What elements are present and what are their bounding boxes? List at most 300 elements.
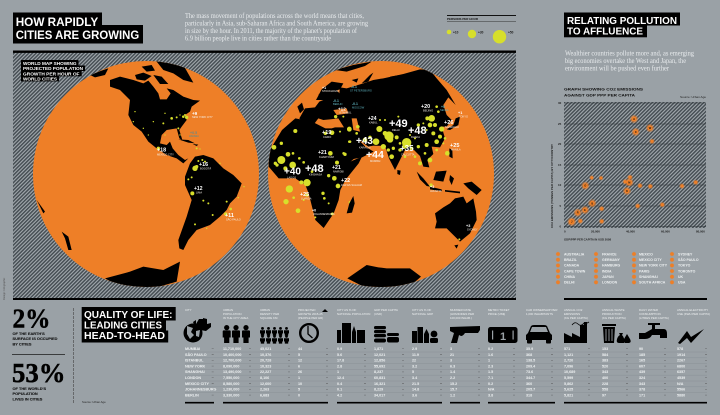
column headers: ANNUAL CO2 [564,308,583,312]
eastern hemisphere globe [268,61,494,288]
chart legend: CAPE TOWN [564,269,586,273]
column: co2: 5,625 [564,388,573,392]
chart legend: SOUTH AFRICA [639,281,666,285]
data point letters: R [577,211,579,215]
icon: globe with city [184,318,211,342]
column: density: 8,106 [260,376,269,380]
intro paragraph: in size by the hour. In 2011, the majority of the planet's population of [185,28,358,35]
city labels east: +0 [441,105,445,109]
side credit: Design: Infographic [2,277,6,300]
row dashes [213,348,706,398]
column: projected growth: 1 [298,376,300,380]
city labels east: MOSCOW [352,106,365,110]
philippines [449,148,453,158]
seas [333,108,360,132]
arabian peninsula [352,140,374,159]
pollution paragraph: environment will be pushed even further [565,66,670,72]
column: electricity: 4539 [677,376,685,380]
data points [568,115,698,226]
city labels east: STOCKHOLM [322,89,338,93]
column headers: (HOMICIDES PER [450,312,474,316]
arctic islands and greenland [90,61,193,84]
city labels east: +25 [300,192,309,198]
column: gdp per capita: 1,871 [374,347,383,351]
city labels east: LAGOS [287,176,296,180]
column headers: PRODUCTION [602,312,621,316]
column headers: ANNUAL ELECTRICITY [677,308,708,312]
city dots oceania [332,183,460,240]
data point letters: B [591,201,593,205]
chart legend: USA [678,281,686,285]
column: water: 439 [639,370,645,374]
column: density: 10,323 [260,364,271,368]
column: projected growth: 44 [298,347,303,351]
column: city: MEXICO CITY [185,382,210,386]
column headers: EMISSIONS [564,312,580,316]
column: murder rate: 3 [450,347,452,351]
antarctica [105,262,180,288]
city labels east: KINSHASA [309,172,322,176]
pollution paragraph: big economies overtake the West and Japan, the [565,58,686,65]
column headers: ANNUAL WASTE [602,308,625,312]
column headers: (PEOPLE PER HR) [298,316,323,320]
legend: persons per hour: +50 [508,30,514,34]
city labels east: ISTANBUL [339,110,352,114]
column: population: 11,710,000 [223,347,241,351]
column headers: (KG PER CAPITA) [564,316,588,320]
british isles [297,103,304,113]
column: share of population: 4.2 [337,393,342,397]
column: murder rate: 2.2 [450,376,455,380]
column: water: 343 [639,382,645,386]
city labels east: CALCUTTA [401,152,415,156]
chart legend: MEXICO [639,252,653,256]
icon: three people [223,325,250,343]
column: share of gdp: 2.9 [412,347,417,351]
column: waste: 343 [602,370,608,374]
hatched map background [13,51,516,299]
column: projected growth: 5 [298,353,300,357]
column: water: 171 [639,393,645,397]
right panel top rule [564,298,707,300]
column: waste: 153 [602,347,608,351]
legend: persons per hour: +10 [453,30,459,34]
city labels west [157,111,241,222]
column: share of gdp: 22 [412,359,416,363]
column: metro price: 1.5 [488,370,493,374]
chart legend: AUSTRALIA [564,252,585,256]
city labels east: +44 [366,149,384,161]
section title: relating pollution to affluence [564,12,680,38]
stat: 53%: 53% [12,358,66,388]
column: cars: 35.9 [526,347,533,351]
chart legend: SHANGHAI [639,275,658,279]
icon: crowd of people [260,327,289,344]
column: share of gdp: 3.6 [412,393,417,397]
chart legend: NEW YORK CITY [639,264,668,268]
chart legend: LONDON [602,281,618,285]
city labels east: SHANGHAI [445,125,459,129]
city labels east: JOHANNESBURG [313,212,335,216]
city labels east: NAIROBI [333,170,344,174]
column: murder rate: 6.3 [450,364,455,368]
stat: 2%: OF THE EARTH'S [12,331,45,336]
column headers: (KG PER CAPITA) [602,316,626,320]
city labels east: +0 [312,208,316,212]
column: cars: 344.7 [526,376,535,380]
western hemisphere globe [33,61,259,288]
column: waste: 97 [602,393,606,397]
column: share of population: 17.8 [337,359,344,363]
icon: buildings [337,323,365,343]
caribbean islands [178,139,198,146]
city labels west: +18 [157,148,166,154]
city labels west: NEW YORK CITY [192,115,213,119]
icon: coins [374,326,399,342]
data point letters: J [571,220,573,224]
arctic coast and islands [336,62,398,83]
column: co2: 5,599 [564,376,573,380]
axis labels: 0 [564,230,566,234]
column: city: MUMBAI [185,347,200,351]
icon: factory [564,322,589,343]
chart legend: TORONTO [678,269,696,273]
axis labels: 60,000 [661,230,670,234]
column: murder rate: 15.7 [450,388,457,392]
city labels east: MANILA [451,148,461,152]
city labels east: +22 [341,178,350,184]
city labels east: KABUL [369,120,378,124]
column: murder rate: 1.4 [450,370,456,374]
icon: bin and bags [602,324,631,343]
title: how rapidly cities are growing [13,12,143,44]
city labels east: +25 [450,143,460,149]
column: electricity: 1914 [677,353,686,357]
city labels east: SEOUL [440,108,449,112]
column: cars: 318 [526,393,532,397]
map title box: WORLD CITIES [23,77,57,82]
city labels west: LIMA [196,190,202,194]
column: share of gdp: 14.8 [412,388,419,392]
chart legend: DELHI [564,281,575,285]
column: projected growth: 26 [298,370,302,374]
column: metro price: 7.1 [488,376,493,380]
city labels east: DHAKA [411,135,420,139]
column: waste: 400 [602,376,608,380]
column headers: SQUARE KM [260,316,278,320]
axis labels: 25 [558,122,562,126]
column: waste: 383 [602,359,608,363]
column: population: 13,490,000 [223,370,241,374]
column: population: 8,090,000 [223,364,239,368]
city labels west: SÃO PAULO [226,216,241,222]
column: metro price: 0.2 [488,347,493,351]
axis labels [550,101,705,242]
chart legend: UK [678,275,684,279]
data point letters: A [633,117,635,121]
chart legend: TOKYO [678,264,691,268]
column: density: 22,227 [260,370,271,374]
map title box: WORLD MAP SHOWING [23,61,77,66]
scandinavia [316,82,343,100]
southeast asia islands [417,171,482,195]
scatter chart: co2 vs gdp [550,86,706,285]
city labels west: BOGOTÁ [200,166,211,170]
column: water: 607 [639,364,645,368]
column: gdp per capita: 12,856 [374,359,385,363]
city labels east: -0.1 [333,99,339,103]
chart legend: SÃO PAULO [678,257,699,262]
city labels east: BEIJING [423,108,433,112]
australia [435,197,477,242]
city labels west: +0.5 [190,131,197,135]
column: murder rate: 1.2 [450,393,455,397]
column: gdp per capita: 12,021 [374,353,385,357]
city labels east: +40 [284,166,301,178]
chart legend: BRAZIL [564,258,578,262]
column headers: GROWTH 2015-25 [298,312,323,316]
column: electricity: N/A [677,382,684,386]
intro paragraph [185,13,369,42]
data point letters: X [635,130,637,134]
city labels east: CAIRO [323,135,331,139]
column: share of population: 2.8 [337,364,342,368]
chart legend: GERMANY [602,258,621,262]
section title: relating pollution to affluence: TO AFFLUENCE [567,26,643,38]
row lines [185,352,707,393]
column: density: 2,263 [260,388,269,392]
column headers: URBAN [260,308,270,312]
stat: 2% [12,304,58,346]
chart legend: CANADA [564,264,580,268]
city labels west: HAVANA [189,135,199,138]
column: co2: 571 [564,347,570,351]
column headers: CAR OWNERSHIP PER [526,308,557,312]
chart title: AGAINST GDP PPP PER CAPITA [564,92,635,98]
city labels east: +19 [322,130,332,136]
city dots africa [272,125,359,218]
column: projected growth: 0 [298,393,300,397]
column: share of population: 0.9 [337,347,342,351]
icon: clock [300,309,328,342]
city labels east: JAKARTA [430,189,442,193]
column: co2: 1,121 [564,353,573,357]
column headers: CITY [185,308,192,312]
column: electricity: 578 [677,347,683,351]
city labels west: +9 [192,111,198,116]
city labels east: +35 [400,144,414,153]
legend: persons per hour [447,15,516,43]
column: population: 7,550,000 [223,376,239,380]
column: water: 185 [639,353,645,357]
table: head-to-head [184,308,710,403]
column: gdp per capita: 55,692 [374,364,385,368]
chart legend: PARIS [639,269,650,273]
column: density: 12,600 [260,382,271,386]
column: cars: 368 [526,353,532,357]
column: co2: 5,821 [564,393,573,397]
data point letters: M [628,180,630,184]
column: density: 45,021 [260,347,271,351]
column: density: 10,376 [260,353,271,357]
south america [178,155,242,250]
chart legend: SYDNEY [678,252,693,256]
city labels east: LUANDA [301,196,312,200]
column headers: 100,000 INHAB.) [450,316,472,320]
column: share of gdp: 5 [412,370,414,374]
data point letters [571,117,652,224]
stat: 53% [12,358,66,402]
panel: world map [13,50,516,300]
stat: 53%: OF THE WORLD'S [12,386,46,391]
axis labels: 5 [560,204,562,208]
axis labels: CO2 EMISSIONS (TONNES PER CAPITA) BY CITY/COUNTRY [550,144,554,228]
column headers: NATIONAL POPULATION [337,312,370,316]
column headers: URBAN [223,308,233,312]
column headers: (USD) [374,312,382,316]
column: metro price: 2.3 [488,364,493,368]
title: quality of life: QUALITY OF LIFE: [84,310,172,321]
column headers: POPULATION [223,312,241,316]
title: quality of life: HEAD-TO-HEAD [84,331,165,342]
column: city: LONDON [185,376,201,380]
column: water: 378 [639,388,645,392]
column: water: 90 [639,347,643,351]
column: electricity: 5566 [677,388,685,392]
icon: buildings and coins [412,327,438,343]
axis labels: 0 [560,224,562,228]
map title box: PROJECTED POPULATION [23,66,83,71]
city labels east: SYDNEY [467,228,478,232]
column: electricity: 6800 [677,364,685,368]
city labels east: +3 [430,185,434,189]
column headers: (LITRES PER CAPITA) [639,316,669,320]
city labels east: ST PETERSBURG [350,88,372,92]
city labels east: +3 [466,224,470,228]
column: population: 1,230,000 [223,388,239,392]
city labels east [284,85,478,232]
chart legend: FRANCE [602,252,617,256]
column headers: CITY AS % OF [412,308,431,312]
column headers: DENSITY PER [260,312,279,316]
stat: 53%: LIVES IN CITIES [12,396,43,402]
column: co2: 10,689 [564,370,575,374]
column: share of population: 5.6 [337,353,342,357]
legend: persons per hour: PERSONS PER HOUR [447,17,479,21]
city labels east: +12 [338,106,346,112]
column: city: SHANGHAI [185,370,205,374]
madagascar [347,196,355,213]
pollution paragraph: Wealthier countries pollute more and, as emerging [565,50,695,58]
stat: 2%: 2% [12,304,50,334]
column: metro price: 1.6 [488,353,493,357]
column: metro price: N/A [488,388,495,392]
column headers: MURDER RATE [450,308,471,312]
column: metro price: 1 [488,359,490,363]
icon: water tap [639,323,667,339]
axis labels: 10 [558,183,562,187]
stat: 53%: POPULATION [12,391,38,396]
column: share of gdp: 11.9 [412,353,419,357]
column: population: 8,580,000 [223,382,239,386]
icon: handgun [450,326,480,343]
city labels west: +12 [194,186,203,192]
axis labels: 40,000 [626,230,635,234]
column headers: USE (KWH PER CAPITA) [677,312,710,316]
column: projected growth: 12 [298,359,302,363]
city labels east: +1 [458,111,462,115]
axis labels: 15 [558,163,562,167]
column: cars: 209.4 [526,364,536,368]
chart title: GRAPH SHOWING CO2 EMISSIONS [564,86,643,92]
column headers: METRO TICKET [488,308,510,312]
japan [447,117,460,130]
data point letters: O [584,184,586,188]
city dots west [133,111,245,229]
data point letters: K [626,189,628,193]
column: gdp per capita: 16,321 [374,382,385,386]
column: city: NEW YORK [185,364,206,368]
chart legend: HAMBURG [602,264,621,268]
stat: 2%: SURFACE IS OCCUPIED [12,336,58,341]
city labels east: +21 [318,150,327,156]
chart title: Source: Urban Age [680,95,706,99]
city labels east: +49 [389,118,408,130]
column: share of population: 12.4 [337,376,345,380]
column headers: 1,000 INHABITANTS [526,312,553,316]
city labels east: +48 [305,163,324,175]
column headers: NATIONAL GDP [412,312,433,316]
africa [269,118,362,228]
column headers: DAILY WATER [639,308,658,312]
chart legend: JAPAN [602,275,614,279]
city labels east: +20 [421,104,430,110]
column: waste: 228 [602,382,608,386]
sri lanka [397,170,401,175]
column: metro price: 0.2 [488,382,493,386]
column: gdp per capita: 8,237 [374,370,383,374]
axis labels: 20 [558,142,562,146]
column: share of population: 0.1 [337,388,342,392]
city labels east: -0.1 [352,102,358,106]
column: density: 6,683 [260,393,269,397]
data point letters: W [649,126,652,130]
column: metro price: 3.8 [488,393,493,397]
column headers: PROJECTED [298,308,316,312]
chart title [564,86,706,99]
column: projected growth: 5 [298,388,300,392]
city labels east: DAR ES SALAAM [341,183,362,187]
map title box: GROWTH PER HOUR OF [23,71,80,76]
column: co2: 2,720 [564,359,573,363]
city labels west: +16 [199,162,208,168]
data point letters: E [584,208,586,212]
column: co2: 7,096 [564,364,573,368]
column headers: GDP PER CAPITA [374,308,398,312]
bottom bars [185,402,707,404]
title: how rapidly cities are growing: CITIES ARE GROWING [16,28,139,42]
column: share of population: 1 [337,370,339,374]
column: gdp per capita: 60,831 [374,376,385,380]
column: co2: 5,862 [564,382,573,386]
city labels east: +1 [322,86,326,90]
column: gdp per capita: 8,229 [374,388,383,392]
column: murder rate: 21 [450,353,454,357]
legend: persons per hour: +30 [478,30,484,34]
chart legend: INDIA [602,269,612,273]
city labels west: MEXICO CITY [157,152,174,156]
column: city: BERLIN [185,393,199,397]
